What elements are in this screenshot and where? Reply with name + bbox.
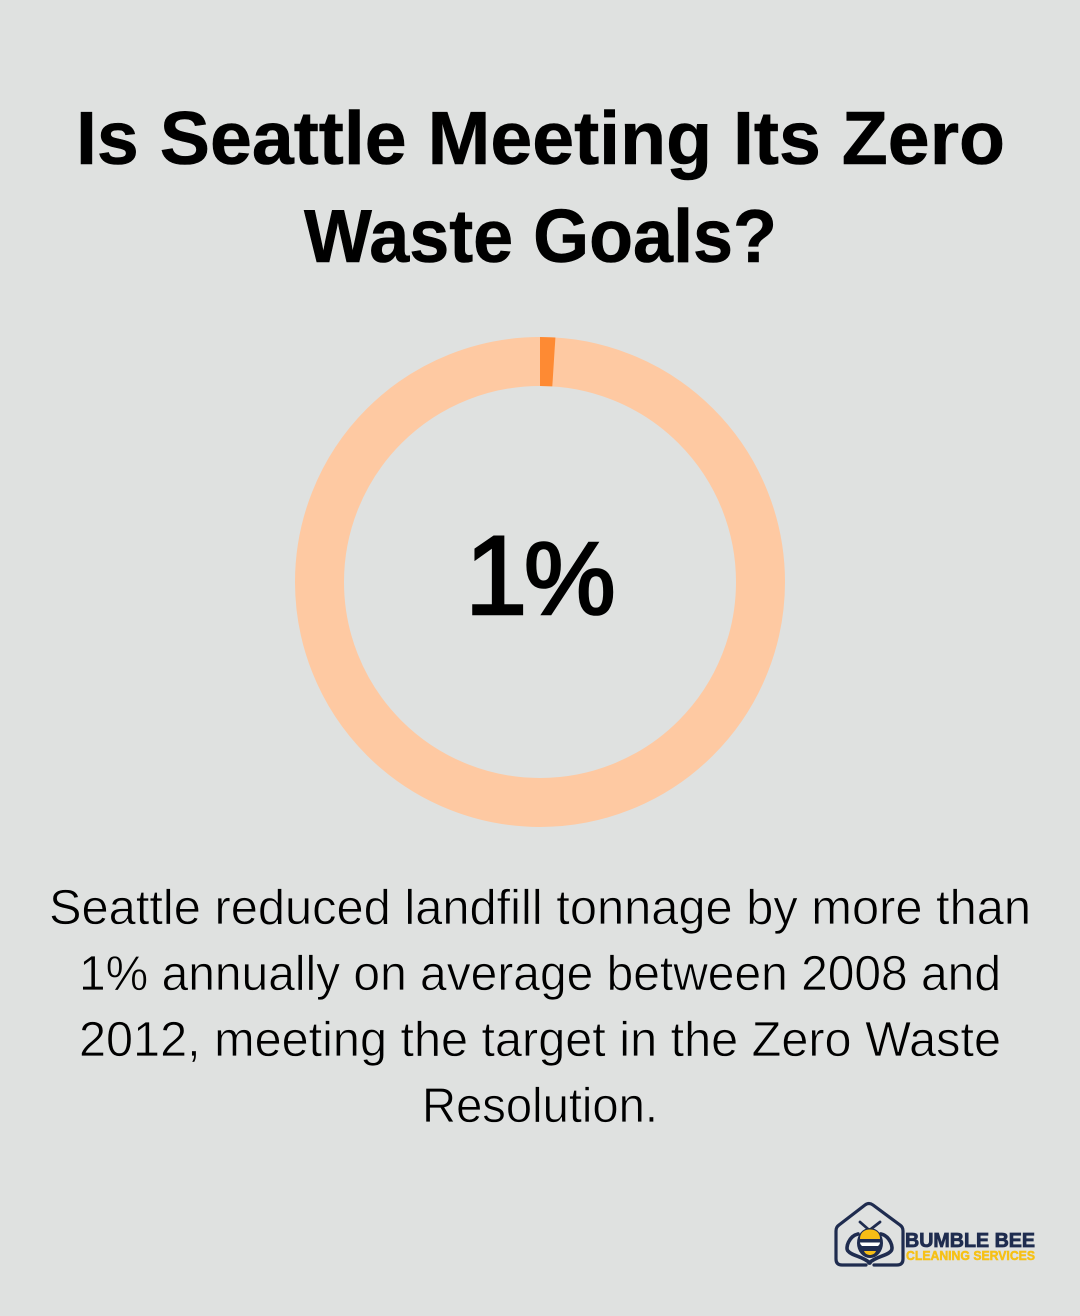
- title: Is Seattle Meeting Its Zero: [76, 96, 1005, 180]
- icon: house outline with bee: [836, 1204, 903, 1265]
- logo tagline: CLEANING SERVICES: [906, 1249, 1035, 1263]
- description text: [49, 881, 1031, 1133]
- description text: Resolution.: [422, 1079, 658, 1133]
- description text: 2012, meeting the target in the Zero Waste: [79, 1013, 1001, 1067]
- chart value segment: [540, 337, 555, 386]
- chart value label: 1: [465, 513, 527, 638]
- chart value label: %: [524, 521, 616, 636]
- chart track: [320, 362, 760, 802]
- title: Waste Goals?: [304, 194, 777, 278]
- description text: 1% annually on average between 2008 and: [79, 947, 1001, 1001]
- description text: Seattle reduced landfill tonnage by more than: [49, 881, 1031, 935]
- logo: Bumble Bee Cleaning Services: [836, 1204, 1035, 1265]
- title: [76, 96, 1005, 278]
- logo wordmark: BUMBLE BEE: [905, 1230, 1035, 1252]
- donut chart: 1%: [320, 337, 760, 802]
